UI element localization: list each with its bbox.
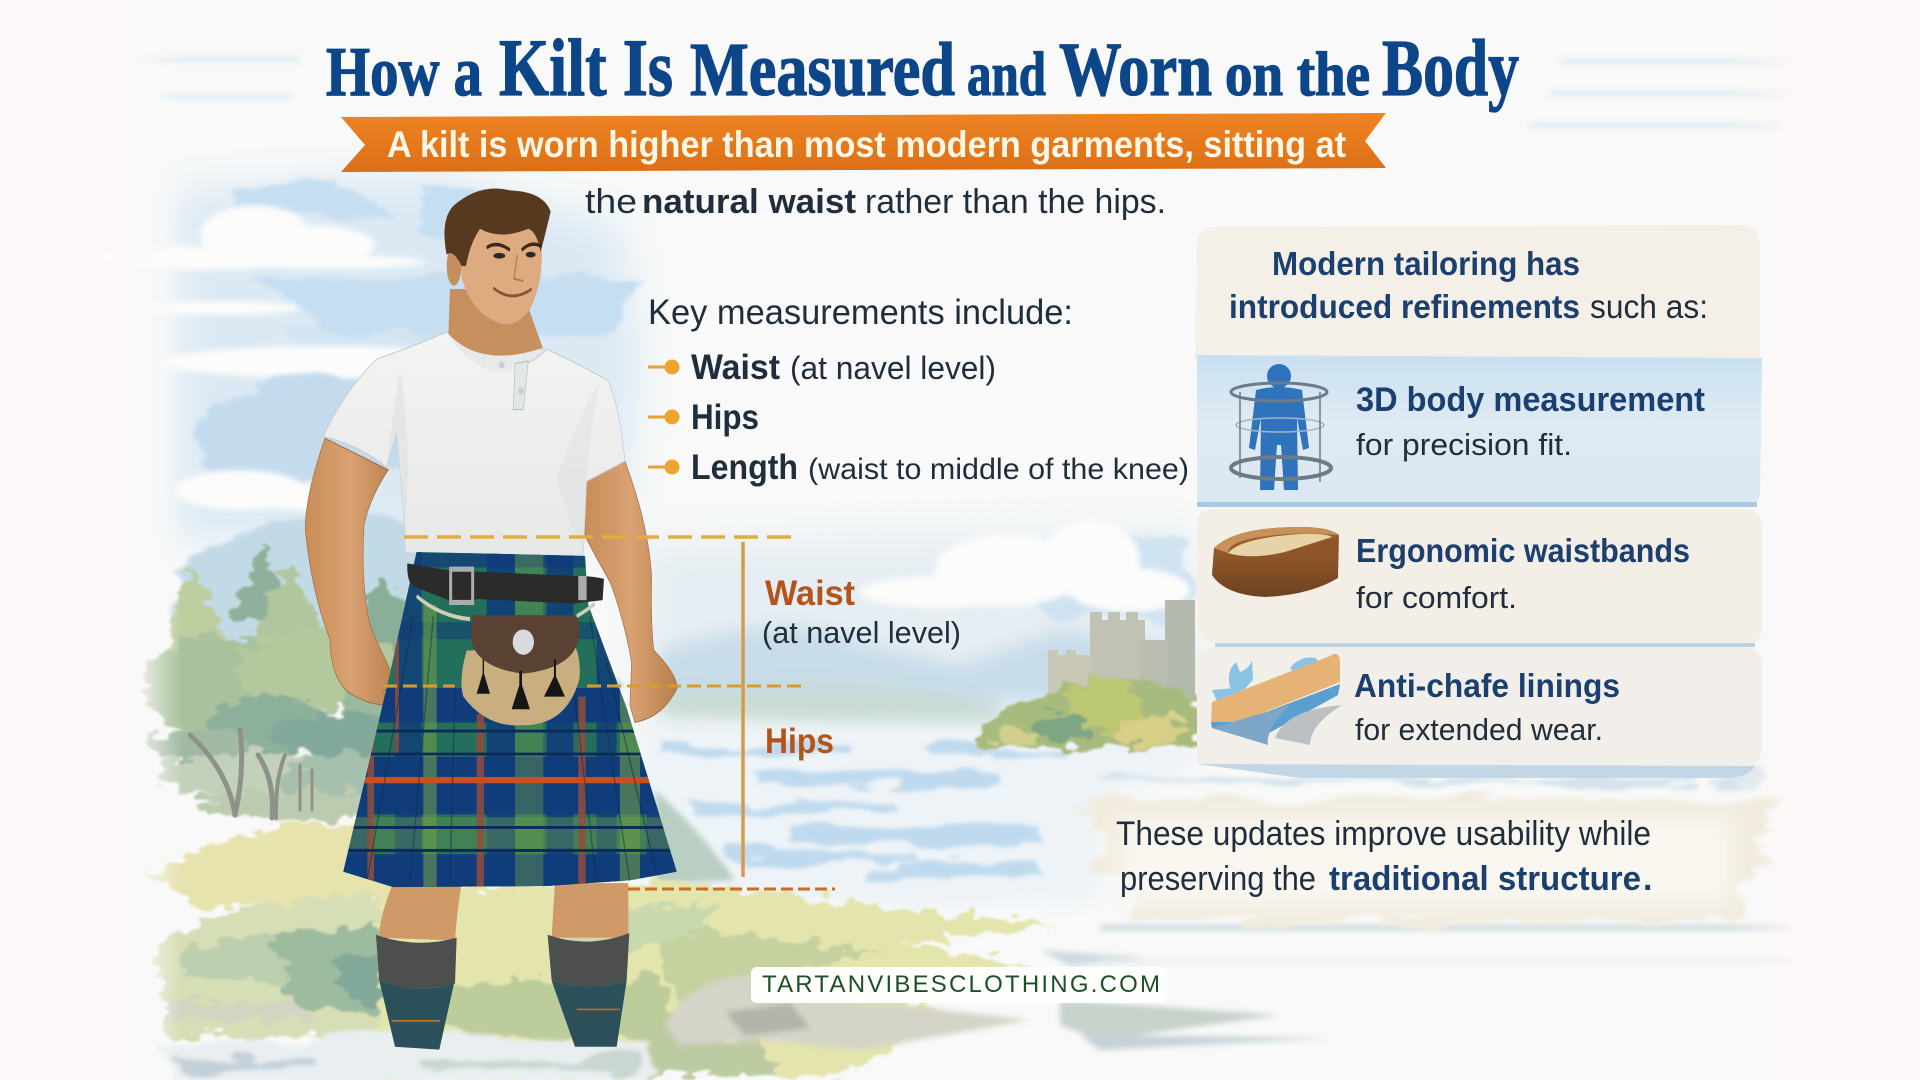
closing note: preserving the <box>1120 860 1316 898</box>
card: 3D body measurement <box>1197 355 1762 507</box>
foreground rocks <box>665 950 1330 1050</box>
label: hips: Hips <box>765 722 834 761</box>
bullet: hips: Hips <box>691 398 759 437</box>
distant hills <box>175 375 620 690</box>
belt <box>407 563 604 606</box>
head <box>444 189 551 324</box>
card: ergonomic waistbands <box>1197 509 1762 647</box>
card heading: introduced refinements <box>1229 288 1580 325</box>
closing note: These updates improve usability while <box>1116 815 1651 853</box>
clouds <box>100 205 1190 612</box>
tree trunks <box>190 730 312 818</box>
icon: 3D body scan <box>1231 364 1331 490</box>
sky washes <box>175 175 1190 720</box>
card: 3D body measurement: for precision fit. <box>1356 427 1572 462</box>
title: Kilt Is <box>499 22 673 113</box>
sky bands <box>230 180 1190 630</box>
bullet: waist <box>648 348 996 387</box>
subtitle <box>585 183 1166 221</box>
subtitle: rather than the hips. <box>865 183 1166 221</box>
website label: TARTANVIBESCLOTHING.COM <box>762 971 1160 998</box>
title: Body <box>1382 25 1519 113</box>
far hills right <box>660 627 1190 725</box>
card heading: Modern tailoring has <box>1272 245 1580 282</box>
slope beside kilt <box>655 790 735 885</box>
key measurements: Key measurements include: <box>648 293 1073 332</box>
meadow beneath the figure <box>380 880 1060 1075</box>
icon: lining layers <box>1211 654 1342 745</box>
label: waist <box>762 574 961 650</box>
title: Measured <box>690 28 955 112</box>
title: on the <box>1225 41 1370 109</box>
castle island <box>975 679 1200 748</box>
orange banner: A kilt is worn higher than most modern garments, sitting at <box>387 124 1346 165</box>
right arm <box>585 461 677 722</box>
card: anti-chafe linings <box>1197 647 1762 778</box>
bullet: hips <box>648 398 759 437</box>
castle <box>1048 600 1195 700</box>
subtitle: natural waist <box>642 183 856 221</box>
tartan kilt <box>340 547 680 892</box>
kilt hose <box>376 933 629 1050</box>
sporran <box>461 615 580 726</box>
card heading <box>1195 225 1760 360</box>
card: 3D body measurement: 3D body measurement <box>1356 381 1705 419</box>
left arm <box>305 438 397 705</box>
card: anti-chafe linings: Anti-chafe linings <box>1354 667 1620 704</box>
bullet: length: Length <box>691 448 798 487</box>
closing note: traditional structure <box>1329 860 1641 898</box>
title <box>326 22 1519 113</box>
trees <box>145 545 445 819</box>
vertical setts <box>340 547 680 892</box>
bullet: waist: (at navel level) <box>790 350 996 386</box>
closing note <box>1073 798 1780 922</box>
title: Worn <box>1059 28 1212 112</box>
man in kilt <box>305 189 680 1050</box>
sporran chain <box>417 596 595 619</box>
icon: leather waistband <box>1212 527 1339 597</box>
cloud over hills <box>175 470 345 510</box>
title: How a <box>326 34 482 111</box>
panel: modern tailoring <box>1195 225 1762 778</box>
neck <box>448 289 543 358</box>
orange banner <box>341 113 1386 172</box>
horizontal setts <box>340 553 680 889</box>
label: waist: (at navel level) <box>762 615 961 650</box>
card heading: such as: <box>1590 288 1708 325</box>
bullet: length: (waist to middle of the knee) <box>808 453 1189 486</box>
card: ergonomic waistbands: for comfort. <box>1356 580 1517 615</box>
shirt <box>323 332 625 556</box>
card: anti-chafe linings: for extended wear. <box>1355 712 1603 747</box>
bullet: waist: Waist <box>691 348 780 387</box>
bullet: length <box>648 448 1189 487</box>
subtitle: the <box>585 183 637 221</box>
loch <box>640 720 1760 910</box>
card: ergonomic waistbands: Ergonomic waistbands <box>1356 532 1690 569</box>
lower left ground <box>160 1030 650 1080</box>
closing note: . <box>1643 860 1652 898</box>
meadow left <box>150 822 430 1040</box>
measurement guides <box>383 537 835 889</box>
horizon stripes <box>140 58 1800 964</box>
title: and <box>967 41 1046 109</box>
label: waist: Waist <box>765 574 855 613</box>
legs <box>378 883 628 941</box>
key measurements <box>648 293 1189 487</box>
